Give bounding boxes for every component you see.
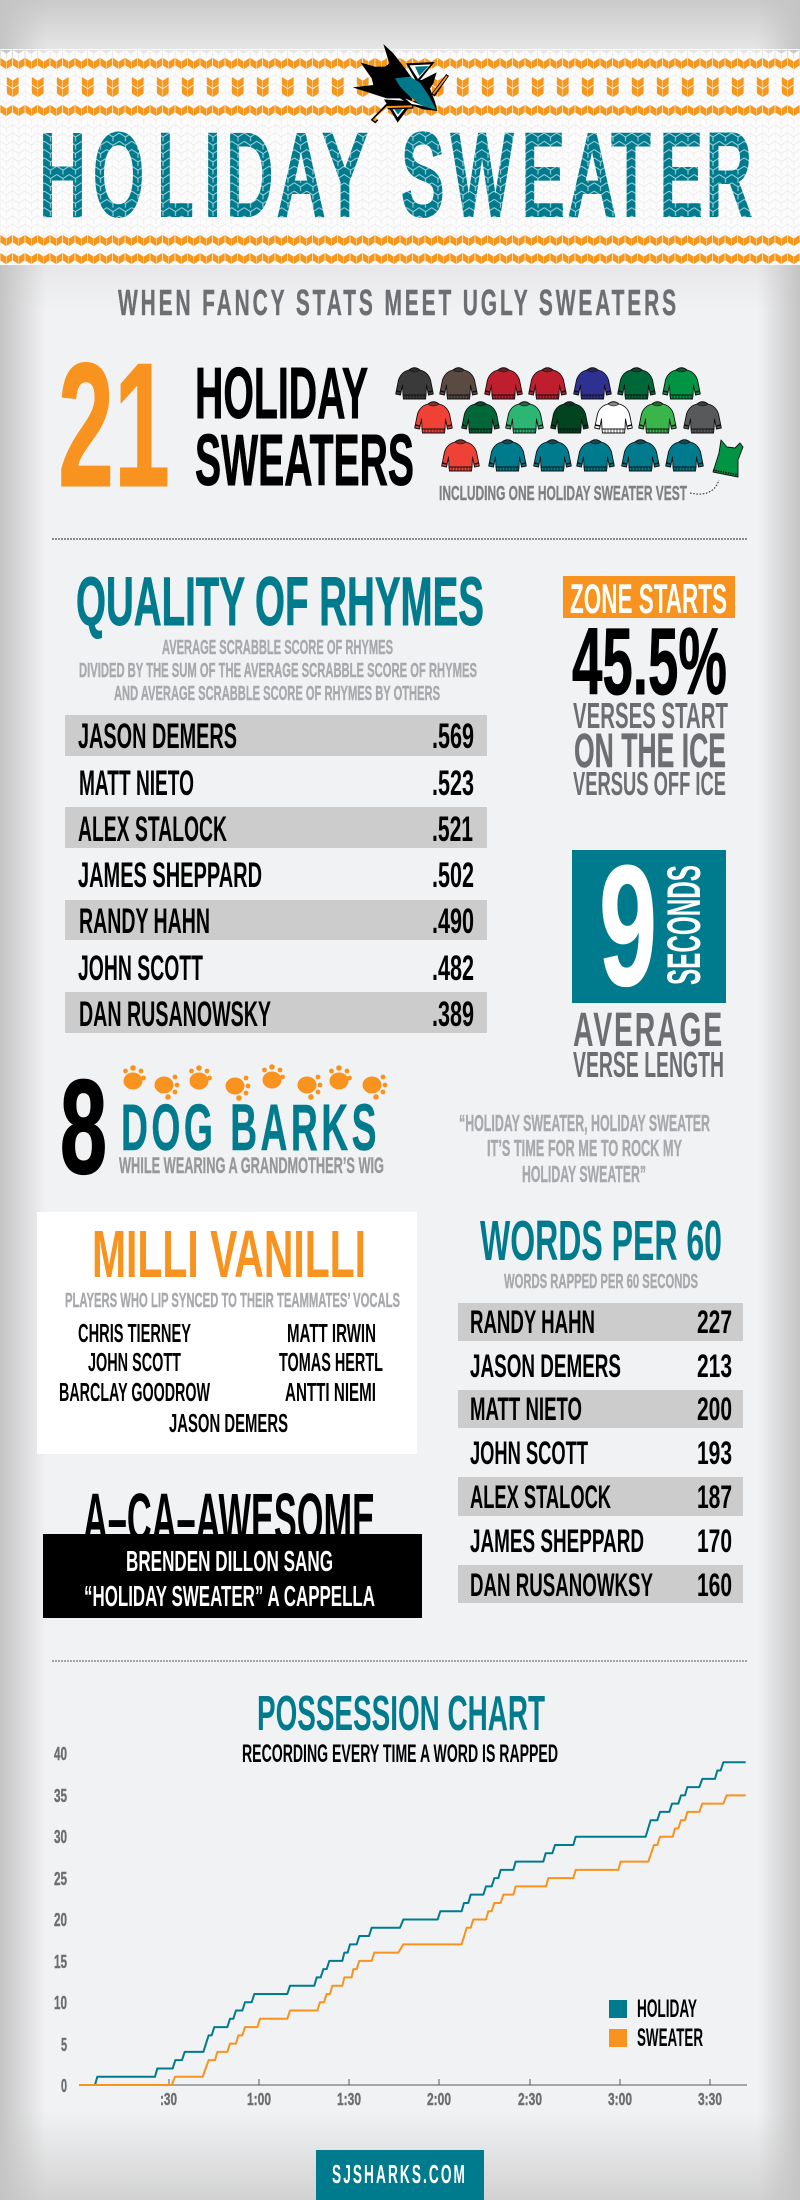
list: player names: BARCLAY GOODROW [59,1377,210,1407]
row: john scott: JOHN SCOTT [470,1435,588,1471]
line chart: possession [54,1744,747,2109]
text block: rhymes definition: AVERAGE SCRABBLE SCORE OF RHYMES [162,637,393,659]
x axis: :30 [160,2089,177,2109]
row: james sheppard: .502 [432,856,474,895]
row: alex stalock [65,807,487,849]
list: player names: CHRIS TIERNEY [78,1318,191,1348]
list: player names [59,1318,383,1438]
heading: holiday sweaters: SWEATERS [195,420,414,501]
heading: dog barks: DOG BARKS [121,1091,380,1164]
y axis labels: 30 [54,1827,67,1848]
panel: 9 seconds [572,830,726,1022]
row: matt nieto: MATT NIETO [470,1391,582,1427]
y axis labels: 40 [54,1744,67,1765]
list: player names: JASON DEMERS [169,1408,288,1438]
icon group: 21 sweaters [396,368,743,477]
row: randy hahn: 227 [697,1304,732,1340]
line: holiday [79,1762,746,2085]
text: A–CA–AWESOME [83,1479,375,1557]
row: randy hahn: RANDY HAHN [79,902,210,941]
table: words per 60 [458,1303,743,1603]
y axis labels: 10 [54,1993,67,2014]
legend: HOLIDAY [637,1996,697,2023]
title: holiday sweater in knit letters: HOLIDAY SWEATER [39,111,752,239]
row: jason demers: JASON DEMERS [470,1348,621,1384]
row: dan rusanowksy: 160 [697,1567,732,1603]
y axis labels: 35 [54,1786,67,1807]
row: dan rusanowksy: DAN RUSANOWKSY [470,1567,653,1603]
panel: 9 seconds: 9 [599,830,657,1022]
list: player names: JOHN SCOTT [88,1347,181,1377]
line: sweater [79,1795,746,2085]
panel: brenden dillon callout: “HOLIDAY SWEATER” A CAPPELLA [84,1581,375,1613]
row: james sheppard: 170 [697,1523,732,1559]
badge: zone starts [563,575,735,622]
row: matt nieto: MATT NIETO [79,764,194,803]
text block: verses start on the ice [573,695,728,803]
quote [459,1110,710,1187]
y axis labels: 5 [61,2035,67,2056]
heading: holiday sweaters: HOLIDAY [195,353,368,434]
quote: HOLIDAY SWEATER” [522,1161,646,1187]
heading: milli vanilli: MILLI VANILLI [92,1217,366,1292]
arrow: dotted line to vest [690,480,719,494]
heading: possession chart: POSSESSION CHART [257,1686,545,1741]
row: john scott: JOHN SCOTT [78,949,203,988]
row: dan rusanowsky: .389 [432,995,474,1034]
row: matt nieto: 200 [697,1391,732,1427]
caption: recording every word: RECORDING EVERY TIME A WORD IS RAPPED [242,1741,558,1768]
list: player names: MATT IRWIN [287,1318,376,1348]
icon: sharks logo [353,44,449,123]
caption: lip synced players: PLAYERS WHO LIP SYNCED TO THEIR TEAMMATES’ VOCALS [65,1290,400,1312]
row: jason demers: 213 [697,1348,732,1384]
panel: brenden dillon callout [43,1534,422,1618]
y axis labels: 0 [61,2076,67,2097]
x axis: 3:30 [698,2089,722,2109]
legend: SWEATER [637,2025,703,2052]
panel: brenden dillon callout: BRENDEN DILLON SANG [126,1546,333,1578]
y axis labels: 20 [54,1910,67,1931]
row: john scott [78,949,474,988]
footer: sjsharks.com [316,2150,484,2200]
x axis [79,2079,747,2109]
row: randy hahn: RANDY HAHN [470,1304,595,1340]
heading: quality of rhymes: QUALITY OF RHYMES [76,564,484,640]
x axis: 1:00 [247,2089,271,2109]
x axis: 3:00 [608,2089,632,2109]
heading: holiday sweaters [195,353,414,501]
list: player names: ANTTI NIEMI [285,1377,376,1407]
text block: rhymes definition: AND AVERAGE SCRABBLE SCORE OF RHYMES BY OTHERS [114,683,440,705]
table: quality of rhymes [65,715,487,1034]
x axis: 2:00 [427,2089,451,2109]
row: jason demers [65,715,487,756]
y axis labels [54,1744,67,2097]
legend [609,1996,703,2052]
caption: grandmother's wig: WHILE WEARING A GRANDMOTHER’S WIG [119,1153,384,1178]
big number 21: 21 [58,326,170,524]
text block: average verse length [573,1004,724,1085]
row: matt nieto [79,764,474,803]
x axis: 1:30 [337,2089,361,2109]
row: james sheppard: JAMES SHEPPARD [470,1523,644,1559]
text block: rhymes definition: DIVIDED BY THE SUM OF THE AVERAGE SCRABBLE SCORE OF RHYMES [79,660,477,682]
row: alex stalock: 187 [697,1479,732,1515]
row: matt nieto [458,1390,743,1428]
row: james sheppard: JAMES SHEPPARD [78,856,262,895]
row: randy hahn [65,900,487,941]
row: dan rusanowsky: DAN RUSANOWSKY [79,995,271,1034]
x axis: 2:30 [518,2089,542,2109]
row: jason demers: JASON DEMERS [78,717,237,756]
text block: rhymes definition [79,637,477,705]
row: alex stalock: .521 [432,810,473,849]
y axis labels: 25 [54,1869,67,1890]
big number 8: 8 [60,1053,107,1202]
header knit sweater band [0,49,800,265]
row: alex stalock: ALEX STALOCK [78,810,227,849]
row: alex stalock: ALEX STALOCK [470,1479,611,1515]
row: john scott: .482 [432,949,474,988]
row: jason demers: .569 [432,717,474,756]
panel: 9 seconds: SECONDS [657,865,710,985]
footer: sjsharks.com: SJSHARKS.COM [332,2159,467,2189]
y axis labels: 15 [54,1952,67,1973]
row: randy hahn: .490 [432,902,474,941]
list: player names: TOMAS HERTL [279,1347,383,1377]
icons: paw prints [123,1064,387,1101]
panel: milli vanilli [37,1212,417,1454]
row: matt nieto: .523 [432,764,474,803]
row: john scott: 193 [697,1435,732,1471]
